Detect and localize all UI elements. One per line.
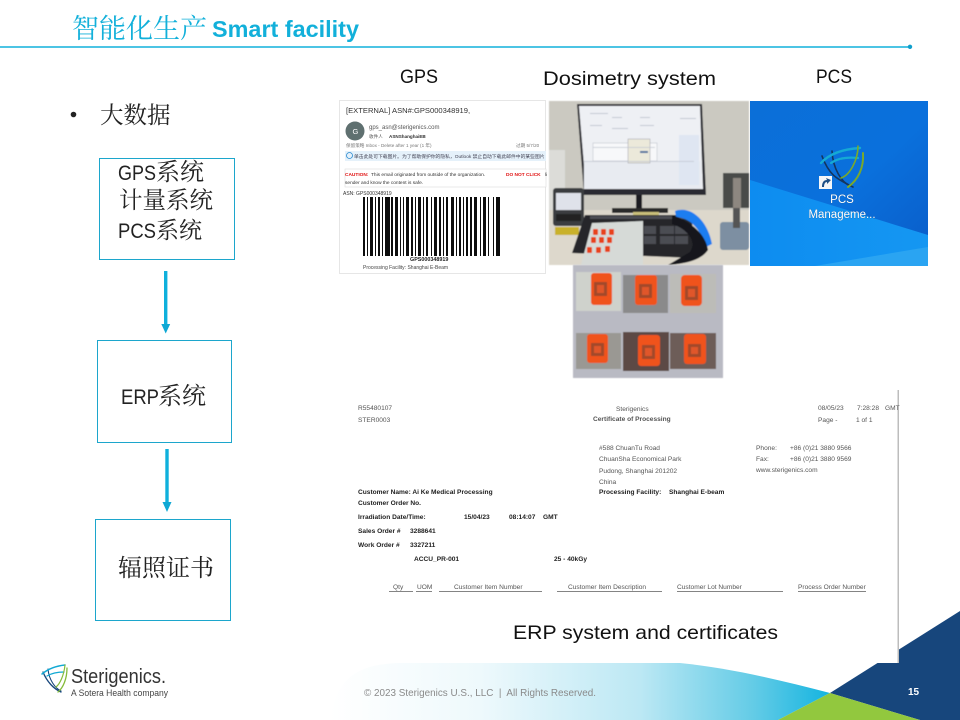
- screenshot: PCS desktop shortcut: PCS: [830, 194, 854, 206]
- screenshot: PCS desktop shortcut: Manageme...: [808, 209, 876, 221]
- document: certificate of processing: 15/04/23: [464, 514, 490, 521]
- title: [72, 7, 359, 46]
- bullet: big data: 大数据: [100, 96, 170, 130]
- document: certificate of processing: STER0003: [358, 417, 391, 424]
- screenshot: GPS email with barcode: GPS000348919: [410, 257, 448, 263]
- box: source systems: 系统: [156, 152, 204, 187]
- document: certificate of processing: Page -: [818, 417, 837, 424]
- keyboard: [572, 215, 693, 258]
- document: certificate of processing: Qty: [393, 584, 404, 591]
- document: certificate of processing: GMT: [885, 405, 900, 412]
- footer: gradient wave: [330, 663, 830, 720]
- pouch B3: [670, 274, 716, 313]
- document: certificate of processing: ChuanSha Economical Park: [599, 456, 682, 463]
- title: Smart facility: [212, 16, 359, 42]
- document: certificate of processing: [340, 390, 900, 663]
- box: ERP system: 系统: [158, 376, 206, 411]
- document: certificate of processing: 3327211: [410, 542, 436, 549]
- caption: ERP system and certificates: ERP system and certificates: [513, 622, 778, 644]
- box: ERP system: ERP: [121, 386, 159, 409]
- label: PCS: PCS: [816, 66, 852, 88]
- screenshot: GPS email with barcode: This email originated from outside of the organization.: [371, 172, 485, 178]
- logo: Sterigenics: Sterigenics.: [71, 666, 166, 688]
- footer: navy corner: [830, 611, 960, 720]
- arrow: sources to ERP: [161, 271, 170, 334]
- pouch C2: [623, 332, 669, 371]
- box: source systems: [100, 152, 234, 260]
- right instrument: [723, 173, 749, 208]
- plate with blister samples: [581, 221, 643, 265]
- screenshot: GPS email with barcode: G: [352, 127, 358, 136]
- photo: six dosimeter pouches: [573, 265, 723, 378]
- screenshot: GPS email with barcode: DO NOT CLICK: [506, 172, 541, 178]
- screenshot: GPS email with barcode: gps_asn@sterigenics.com: [369, 125, 439, 131]
- document: certificate of processing: #588 ChuanTu Road: [599, 445, 660, 452]
- box: source systems: PCS: [118, 220, 156, 243]
- blue and black scanner handle: [675, 210, 712, 247]
- label: dosimetry system: Dosimetry system: [543, 68, 716, 90]
- document: certificate of processing: Sales Order #: [358, 528, 401, 535]
- icon: shortcut arrow: [819, 176, 832, 189]
- document: certificate of processing: Customer Lot Number: [677, 584, 743, 591]
- document: certificate of processing: 08/05/23: [818, 405, 844, 412]
- screenshot: GPS email with barcode: 保留策略 Inbox - Delete after 1 year (1 年): [346, 142, 432, 149]
- box: source systems: GPS: [118, 162, 156, 185]
- screenshot: GPS email with barcode: li: [545, 172, 547, 178]
- document: certificate of processing: Processing Facility:: [599, 489, 661, 496]
- document: certificate of processing: Customer Order No.: [358, 500, 421, 507]
- document: certificate of processing: UOM: [417, 584, 432, 591]
- icon: PCS logo: [821, 146, 863, 187]
- document: certificate of processing: 3288641: [410, 528, 436, 535]
- document: certificate of processing: 08:14:07: [509, 514, 536, 521]
- pouch C1: [576, 333, 621, 369]
- screenshot: GPS email with barcode: 过期 5/7/20: [516, 142, 540, 149]
- footer: green corner: [778, 693, 920, 720]
- screenshot: GPS email with barcode: Processing Facility: Shanghai E-Beam: [363, 265, 448, 271]
- icon: logo mark: [42, 665, 67, 692]
- document: certificate of processing: Work Order #: [358, 542, 400, 549]
- barcode: [363, 197, 500, 256]
- document: certificate of processing: Phone:: [756, 445, 777, 452]
- document: certificate of processing: 7:28:28: [857, 405, 879, 412]
- pouch B1: [576, 272, 621, 311]
- screenshot: PCS desktop shortcut: [750, 101, 928, 266]
- screenshot: GPS email with barcode: CAUTION:: [345, 172, 369, 178]
- box: irradiation certificate: [96, 520, 230, 620]
- document: certificate of processing: +86 (0)21 3880 9566: [790, 445, 852, 452]
- document: certificate of processing: ACCU_PR-001: [414, 556, 459, 563]
- document: certificate of processing: China: [599, 479, 617, 486]
- document: certificate of processing: Irradiation Date/Time:: [358, 514, 426, 521]
- document: certificate of processing: 25 - 40kGy: [554, 556, 587, 563]
- document: certificate of processing: R55480107: [358, 405, 392, 412]
- document: certificate of processing: Process Order Number: [798, 584, 867, 591]
- title rule with end dot: [0, 45, 912, 49]
- document: certificate of processing: Customer Name: Ai Ke Medical Processing: [358, 489, 493, 496]
- arrow: ERP to certificate: [162, 449, 172, 512]
- photo: dosimetry workstation: [549, 101, 749, 265]
- box: ERP system: [98, 340, 232, 442]
- screenshot: GPS email with barcode: 收件人: [369, 133, 383, 140]
- pouch C3: [670, 333, 716, 369]
- monitor: [577, 104, 706, 195]
- document: certificate of processing: Fax:: [756, 456, 769, 463]
- document: certificate of processing: www.sterigenics.com: [755, 467, 818, 474]
- box: source systems: 计量系统: [119, 181, 213, 215]
- logo: Sterigenics: A Sotera Health company: [71, 688, 168, 699]
- title: 智能化生产: [72, 7, 207, 46]
- screenshot: GPS email with barcode: ASNShanghaiEB: [389, 134, 426, 139]
- screenshot: GPS email with barcode: sender and know the content is safe.: [345, 180, 423, 186]
- document: certificate of processing: Pudong, Shanghai 201202: [599, 468, 677, 475]
- document: certificate of processing: Customer Item Number: [454, 584, 523, 591]
- footer: copyright: © 2023 Sterigenics U.S., LLC | All Rights Reserved.: [364, 687, 596, 699]
- document: certificate of processing: 1 of 1: [856, 417, 873, 424]
- screenshot: GPS email with barcode: [EXTERNAL] ASN#:GPS000348919,: [346, 106, 470, 115]
- label: GPS: GPS: [400, 66, 438, 88]
- box: source systems: 系统: [156, 212, 202, 245]
- document: certificate of processing: +86 (0)21 3880 9569: [790, 456, 852, 463]
- document: certificate of processing: Certificate of Processing: [593, 416, 671, 423]
- footer: page number: 15: [908, 687, 920, 698]
- document: certificate of processing: Sterigenics: [616, 406, 649, 413]
- screenshot: GPS email with barcode: 单击此处可下载图片。为了帮助保护你的隐私，Outlook 禁止自动下载此邮件中的某些图片: [354, 153, 545, 160]
- pouch B2: [623, 275, 668, 313]
- box: irradiation certificate: 辐照证书: [118, 548, 214, 583]
- document: certificate of processing: GMT: [543, 514, 558, 521]
- document: certificate of processing: Customer Item Description: [568, 584, 646, 591]
- left reader device: [553, 188, 584, 226]
- logo: Sterigenics: [42, 665, 168, 699]
- document: certificate of processing: Shanghai E-beam: [669, 489, 724, 496]
- screenshot: GPS email with barcode: ASN: GPS000348919: [343, 191, 392, 197]
- screenshot: GPS email with barcode: [339, 100, 547, 274]
